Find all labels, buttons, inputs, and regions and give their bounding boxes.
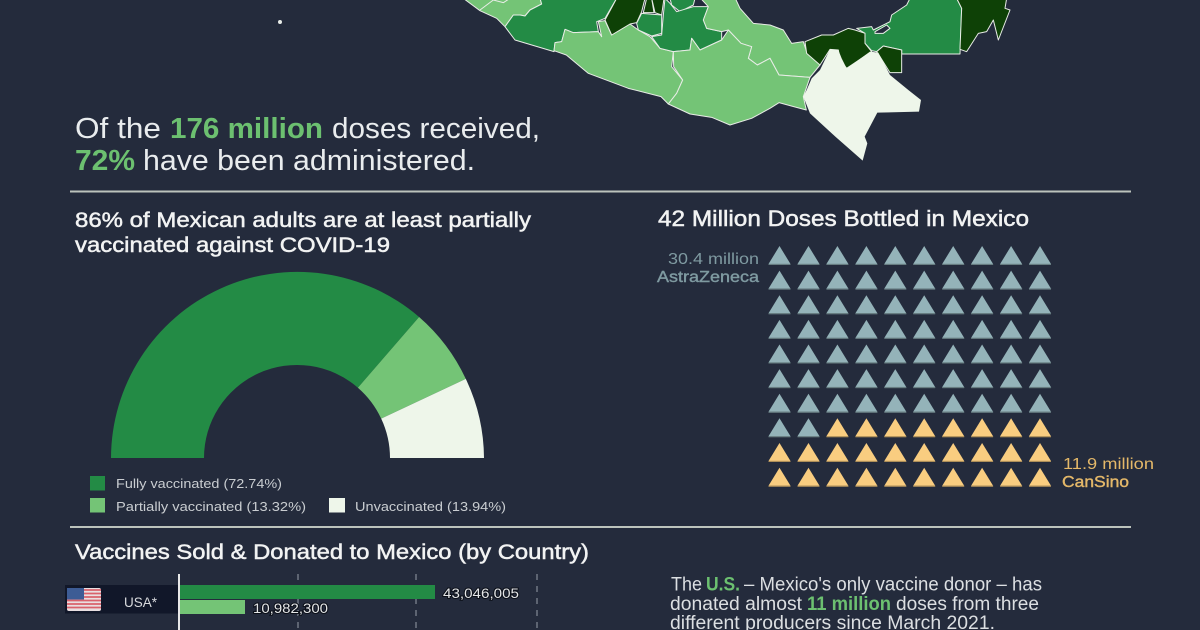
bar chart <box>65 574 537 630</box>
headline: doses received, <box>332 113 540 145</box>
panel: doses bottled in Mexico <box>657 206 1154 491</box>
state: Quintana Roo <box>957 0 1010 52</box>
label: CanSino: CanSino <box>1062 474 1129 491</box>
label: AstraZeneca: AstraZeneca <box>657 269 759 286</box>
text block: donor note: – Mexico's only vaccine donor – has <box>744 574 1042 596</box>
heading: doses bottled: 42 Million Doses Bottled in Mexico <box>658 206 1029 231</box>
label: AstraZeneca <box>657 251 759 286</box>
state: Jalisco and Colima <box>463 0 542 27</box>
state: Michoacan <box>505 0 617 52</box>
bar: donated <box>179 600 245 614</box>
state: Tabasco <box>805 28 872 68</box>
panel: vaccination status <box>75 208 531 514</box>
state: Puebla <box>652 0 722 52</box>
label: AstraZeneca: 30.4 million <box>668 251 759 268</box>
state: Mexico <box>605 0 645 35</box>
text block: donor note: U.S. <box>706 574 740 596</box>
state: Campeche <box>857 0 962 54</box>
text block: donor note: doses from three <box>896 594 1039 615</box>
island <box>278 20 282 24</box>
text block: donor note: The <box>671 574 702 596</box>
legend: Unvaccinated (13.94%) <box>355 499 506 514</box>
heading: vaccines by country: Vaccines Sold & Donated to Mexico (by Country) <box>75 540 589 564</box>
state: Hidalgo <box>670 0 695 12</box>
legend: Partially vaccinated (13.32%) <box>116 499 306 514</box>
headline: Of the <box>75 113 161 145</box>
label: USA: USA* <box>124 595 158 610</box>
headline: 176 million <box>170 113 323 145</box>
heading: vaccination status: 86% of Mexican adults are at least partially <box>75 208 531 232</box>
state: Guerrero <box>554 21 683 104</box>
icon: USA flag <box>67 588 101 611</box>
state: Tlaxcala <box>652 0 664 15</box>
state: Veracruz <box>701 0 820 77</box>
divider <box>70 190 1131 192</box>
headline: 72% <box>75 145 135 177</box>
headline: have been administered. <box>143 145 475 177</box>
state: Oaxaca <box>668 30 810 125</box>
heading: vaccination status <box>75 208 531 257</box>
label: CanSino <box>1062 456 1154 491</box>
donut chart <box>111 272 484 458</box>
label: CanSino: 11.9 million <box>1063 456 1154 473</box>
state: Campeche south <box>877 46 902 73</box>
heading: vaccination status: vaccinated against COVID-19 <box>75 233 390 257</box>
legend <box>90 476 506 514</box>
state: Chiapas <box>803 49 921 161</box>
value: sold: 43,046,005 <box>443 585 519 601</box>
state: Morelos <box>637 13 662 36</box>
text block: donor note <box>670 574 1042 630</box>
map of southern Mexico <box>463 0 1010 161</box>
text block: donor note: donated almost <box>670 594 803 615</box>
pictogram: triangles <box>768 246 1051 487</box>
headline <box>75 113 540 177</box>
state: Mexico City <box>643 0 654 13</box>
text block: donor note: 11 million <box>807 594 891 615</box>
bar: sold <box>179 585 435 599</box>
value: donated: 10,982,300 <box>253 600 328 616</box>
panel: vaccines by country <box>65 540 1042 630</box>
bay inlet <box>875 25 890 33</box>
legend: Fully vaccinated (72.74%) <box>116 476 282 491</box>
